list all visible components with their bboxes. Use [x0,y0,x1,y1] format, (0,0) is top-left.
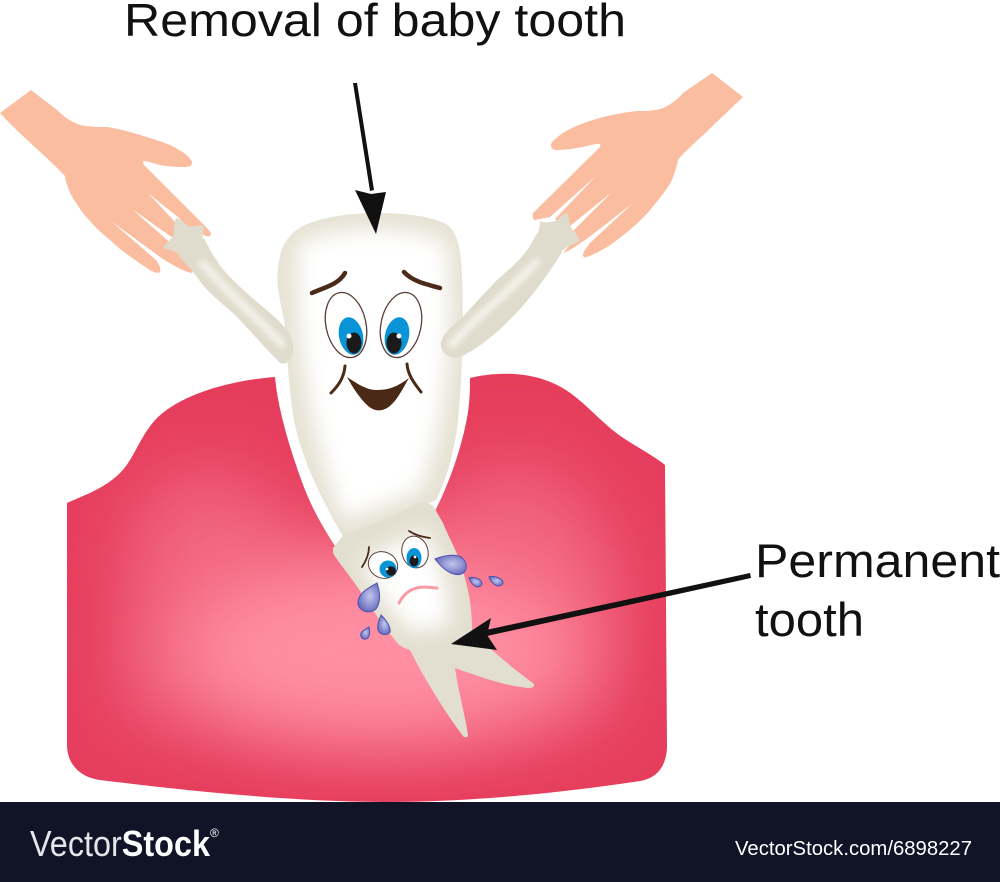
footer url: VectorStock.com/6898227 [735,838,972,860]
tears [358,555,503,639]
permanent tooth [333,503,534,737]
left eyebrow [362,547,369,567]
right hand lower finger [532,222,565,252]
right eye [398,533,432,571]
left arm [163,218,293,364]
left eyebrow [312,273,345,293]
left eye [320,289,372,361]
smile lines [331,364,421,393]
footer logo: VectorStock [30,823,211,864]
baby tooth [277,213,463,540]
label: permanent tooth: tooth [755,593,864,646]
mouth [347,377,409,410]
right hand [533,73,743,257]
label: permanent tooth: Permanent [755,534,1000,587]
sad mouth [399,587,437,603]
right eye [375,289,427,361]
left eye [364,547,402,583]
arrow: removal of baby tooth [353,83,386,234]
right arm [441,213,579,358]
right eyebrow [409,531,430,538]
footer bar [0,802,1000,882]
right eyebrow [404,272,440,288]
left hand [0,90,211,273]
registered mark: ® [210,826,219,840]
arrow: permanent tooth [451,573,751,650]
right arm star hand [535,213,579,256]
gum [67,374,667,802]
left arm star hand [163,218,204,258]
